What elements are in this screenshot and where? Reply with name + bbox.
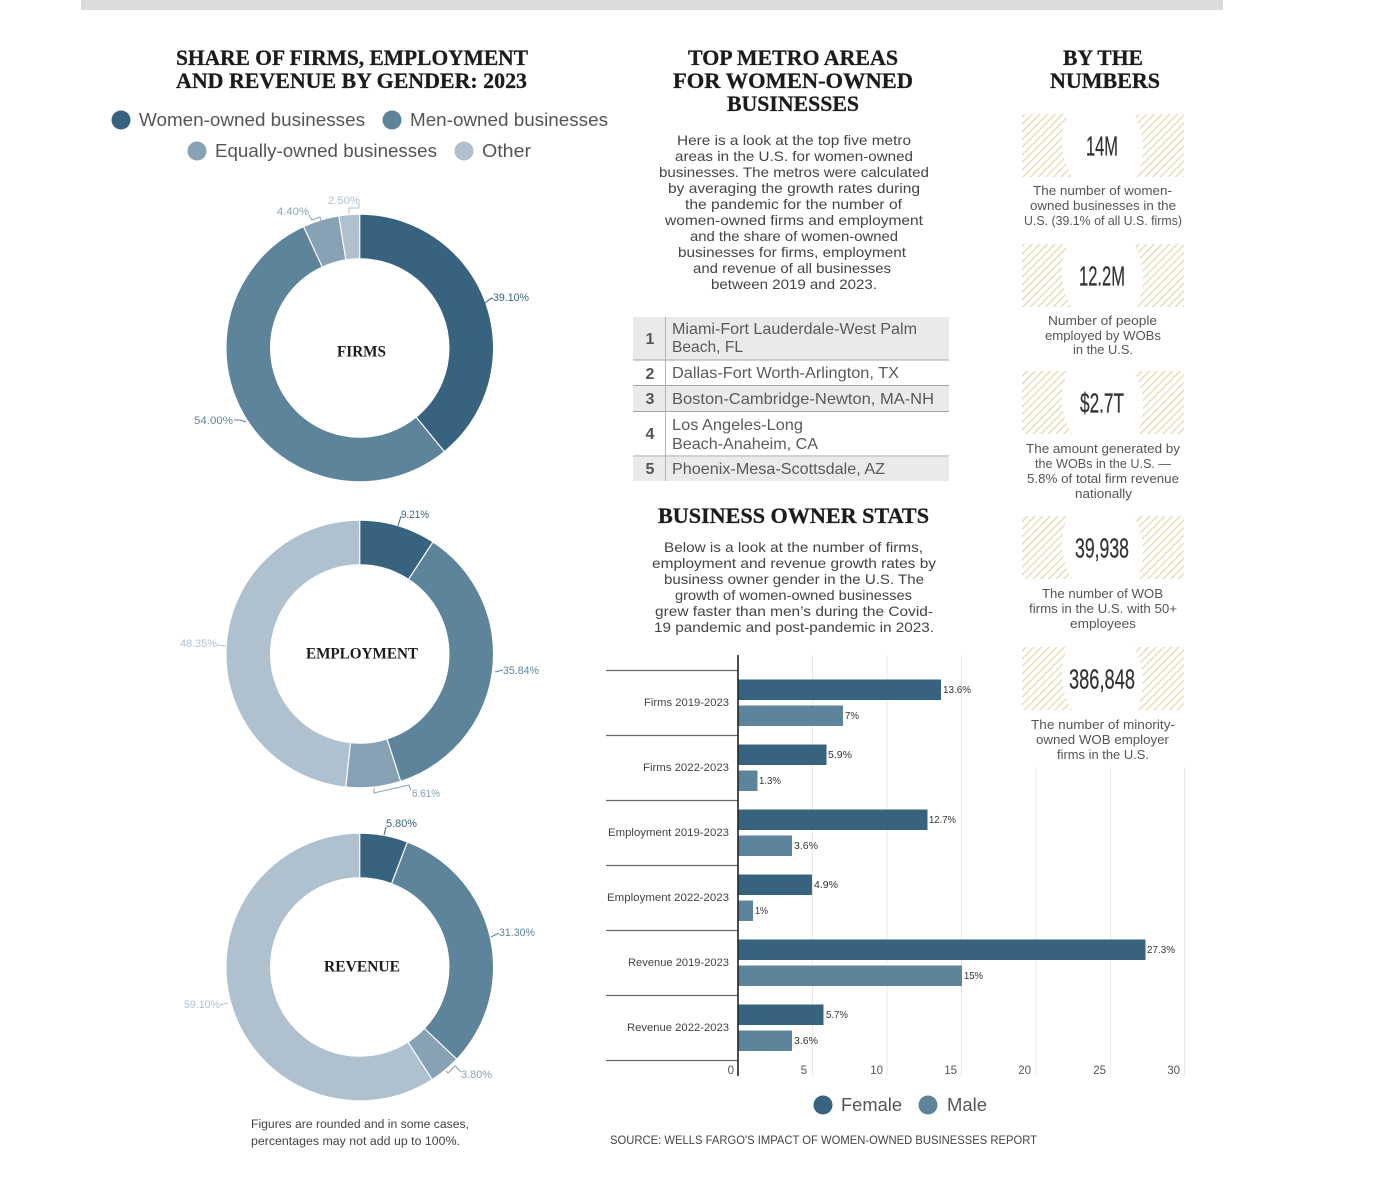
bars: employment 2019-2023: 12.7% <box>929 814 956 826</box>
heading: share by gender <box>176 45 528 93</box>
legend: female and male: Male <box>947 1095 987 1115</box>
stat: 39,938 <box>1022 516 1184 631</box>
bars: firms 2022-2023 <box>643 744 852 791</box>
heading: top metro areas: BUSINESSES <box>727 91 859 116</box>
x axis labels <box>728 1065 1180 1077</box>
donut chart: firms: 39.10% <box>493 292 529 304</box>
text block: metro introduction: and revenue of all businesses <box>693 260 891 276</box>
table: top five metros: 2 <box>646 366 655 383</box>
bars: revenue 2019-2023 <box>628 940 1175 986</box>
stat: 14M: The number of women- <box>1033 183 1172 198</box>
text block: metro introduction: between 2019 and 2023. <box>711 276 877 292</box>
table: top five metros: 5 <box>646 461 655 478</box>
text block: metro introduction: the pandemic for the number of <box>685 196 902 212</box>
x axis labels: 25 <box>1093 1065 1106 1077</box>
stat: $2.7T: $2.7T <box>1080 388 1124 418</box>
heading: top metro areas <box>673 45 913 116</box>
bars: revenue 2019-2023: 15% <box>964 970 983 982</box>
stat: 39,938: The number of WOB <box>1042 586 1163 601</box>
panel: business owner stats <box>606 503 1184 1147</box>
stat: 14M <box>1022 114 1184 228</box>
text block: stats introduction: business owner gender in the U.S. The <box>664 571 924 587</box>
heading: by the numbers: NUMBERS <box>1050 68 1160 93</box>
x axis labels: 5 <box>801 1065 807 1077</box>
text block: metro introduction: businesses. The metros were calculated <box>659 164 929 180</box>
panel: top metro areas <box>633 45 949 481</box>
bar chart: growth rates by owner gender <box>606 655 1184 1077</box>
text block: metro introduction <box>659 132 929 292</box>
text block: metro introduction: by averaging the growth rates during <box>668 180 920 196</box>
heading: top metro areas: FOR WOMEN-OWNED <box>673 68 913 93</box>
legend: female and male <box>814 1095 987 1115</box>
bars: firms 2019-2023 <box>644 680 971 726</box>
donut chart: employment: 6.61% <box>412 788 440 800</box>
heading: by the numbers: BY THE <box>1063 45 1143 70</box>
table: top five metros: 3 <box>646 391 655 408</box>
donut chart: revenue: REVENUE <box>324 958 400 976</box>
stat: 386,848: The number of minority- <box>1031 717 1175 732</box>
bars: firms 2019-2023: Firms 2019-2023 <box>644 697 729 709</box>
table: top five metros: Boston-Cambridge-Newton, MA-NH <box>672 391 934 408</box>
stat: 12.2M: employed by WOBs <box>1045 328 1162 343</box>
stat: $2.7T: the WOBs in the U.S. — <box>1035 456 1171 471</box>
donut chart: firms: 4.40% <box>277 206 309 218</box>
bars: firms 2022-2023: 5.9% <box>828 749 852 761</box>
heading: share by gender: SHARE OF FIRMS, EMPLOYMENT <box>176 45 528 70</box>
legend: female and male: Female <box>841 1095 902 1115</box>
text block: stats introduction: growth of women-owned businesses <box>675 587 912 603</box>
donut chart: employment: 35.84% <box>503 665 539 677</box>
text block: metro introduction: and the share of women-owned <box>690 228 898 244</box>
legend: ownership categories <box>112 110 608 161</box>
text block: metro introduction: Here is a look at the top five metro <box>677 132 911 148</box>
table: top five metros: 1 <box>646 331 655 348</box>
donut chart: revenue <box>184 818 535 1081</box>
legend: ownership categories: Men-owned businesses <box>410 110 608 130</box>
stat: 39,938: firms in the U.S. with 50+ <box>1029 601 1177 616</box>
bars: revenue 2019-2023: 27.3% <box>1147 944 1175 956</box>
stat: $2.7T: The amount generated by <box>1026 441 1181 456</box>
footnote: Figures are rounded and in some cases, <box>251 1119 469 1131</box>
footnote: percentages may not add up to 100%. <box>251 1136 460 1148</box>
text block: metro introduction: areas in the U.S. for women-owned <box>675 148 913 164</box>
donut chart: employment: EMPLOYMENT <box>306 646 418 662</box>
donut chart: firms: 54.00% <box>194 415 233 427</box>
stat: 39,938: employees <box>1070 616 1137 631</box>
stat: $2.7T: 5.8% of total firm revenue <box>1027 471 1179 486</box>
heading: business owner stats: BUSINESS OWNER STATS <box>658 503 929 528</box>
bars: employment 2022-2023: 1% <box>755 905 768 917</box>
bars: firms 2019-2023: 7% <box>845 710 859 722</box>
stat: 14M: owned businesses in the <box>1030 198 1176 213</box>
donut chart: revenue: 59.10% <box>184 999 220 1011</box>
table: top five metros: Beach-Anaheim, CA <box>672 436 818 453</box>
bars: revenue 2022-2023 <box>627 1004 848 1051</box>
donut chart: employment <box>180 509 539 800</box>
donut chart: revenue: 3.80% <box>461 1069 492 1081</box>
bars: firms 2019-2023: 13.6% <box>943 684 971 696</box>
x axis labels: 0 <box>728 1065 734 1077</box>
text block: stats introduction: Below is a look at the number of firms, <box>664 539 923 555</box>
bars: employment 2022-2023: 4.9% <box>814 879 838 891</box>
bars: employment 2022-2023: Employment 2022-2023 <box>607 892 729 904</box>
bars: employment 2019-2023: 3.6% <box>794 840 818 852</box>
table: top five metros: Phoenix-Mesa-Scottsdale, AZ <box>672 461 885 478</box>
bars: revenue 2022-2023: 3.6% <box>794 1035 818 1047</box>
donut chart: revenue: 31.30% <box>499 927 535 939</box>
text block: metro introduction: women-owned firms and employment <box>664 212 923 228</box>
legend: ownership categories: Equally-owned businesses <box>215 141 437 161</box>
donut chart: firms <box>194 195 529 460</box>
x axis labels: 15 <box>944 1065 957 1077</box>
text block: stats introduction: grew faster than men’s during the Covid- <box>655 603 933 619</box>
donut chart: firms: FIRMS <box>337 344 386 360</box>
text block: stats introduction: employment and revenue growth rates by <box>652 555 936 571</box>
donut chart: employment: 48.35% <box>180 638 217 650</box>
bars: employment 2022-2023 <box>607 874 838 921</box>
bars: revenue 2019-2023: Revenue 2019-2023 <box>628 957 729 969</box>
stat: 12.2M <box>1022 244 1184 357</box>
table: top five metros <box>633 317 949 481</box>
stat: $2.7T: nationally <box>1075 486 1133 501</box>
table: top five metros: 4 <box>646 426 655 443</box>
donut chart: firms: 2.50% <box>328 195 360 207</box>
table: top five metros: Miami-Fort Lauderdale-West Palm <box>672 321 917 338</box>
x axis labels: 20 <box>1018 1065 1031 1077</box>
bars: employment 2019-2023 <box>608 810 956 856</box>
x axis labels: 30 <box>1167 1065 1180 1077</box>
stat: $2.7T <box>1022 371 1184 501</box>
bars: revenue 2022-2023: 5.7% <box>826 1009 848 1021</box>
stat: 12.2M: Number of people <box>1048 313 1157 328</box>
table: top five metros: Los Angeles-Long <box>672 417 803 434</box>
footnote <box>251 1119 469 1148</box>
panel: share of firms, employment and revenue by gender <box>112 45 608 1148</box>
x axis labels: 10 <box>870 1065 883 1077</box>
legend: ownership categories: Other <box>482 141 531 161</box>
stat: 386,848: 386,848 <box>1069 664 1135 694</box>
bars: revenue 2022-2023: Revenue 2022-2023 <box>627 1022 729 1034</box>
stat: 12.2M: 12.2M <box>1079 260 1125 292</box>
donut chart: employment: 9.21% <box>401 509 429 521</box>
stat: 14M: U.S. (39.1% of all U.S. firms) <box>1024 213 1182 228</box>
text block: stats introduction <box>652 539 936 635</box>
table: top five metros: Beach, FL <box>672 339 743 356</box>
panel: by the numbers <box>1015 30 1195 767</box>
heading: share by gender: AND REVENUE BY GENDER: 2023 <box>176 68 527 93</box>
donut chart: revenue: 5.80% <box>386 818 417 830</box>
stat: 386,848: owned WOB employer <box>1036 732 1170 747</box>
bars: firms 2022-2023: 1.3% <box>759 775 781 787</box>
table: top five metros: Dallas-Fort Worth-Arlington, TX <box>672 365 899 382</box>
legend: ownership categories: Women-owned businesses <box>139 110 365 130</box>
top grey bar <box>81 0 1223 10</box>
text block: stats introduction: 19 pandemic and post-pandemic in 2023. <box>654 619 934 635</box>
bars: firms 2022-2023: Firms 2022-2023 <box>643 762 729 774</box>
stat: 386,848: firms in the U.S. <box>1057 747 1149 762</box>
text block: metro introduction: businesses for firms, employment <box>678 244 906 260</box>
stat: 386,848 <box>1022 647 1184 762</box>
heading: top metro areas: TOP METRO AREAS <box>688 45 898 70</box>
stat: 14M: 14M <box>1086 130 1118 162</box>
bars: employment 2019-2023: Employment 2019-2023 <box>608 827 729 839</box>
source line: SOURCE: WELLS FARGO'S IMPACT OF WOMEN-OWNED BUSINESSES REPORT <box>610 1135 1037 1147</box>
stat: 39,938: 39,938 <box>1075 532 1129 564</box>
stat: 12.2M: in the U.S. <box>1073 342 1133 357</box>
heading: by the numbers <box>1050 45 1160 93</box>
